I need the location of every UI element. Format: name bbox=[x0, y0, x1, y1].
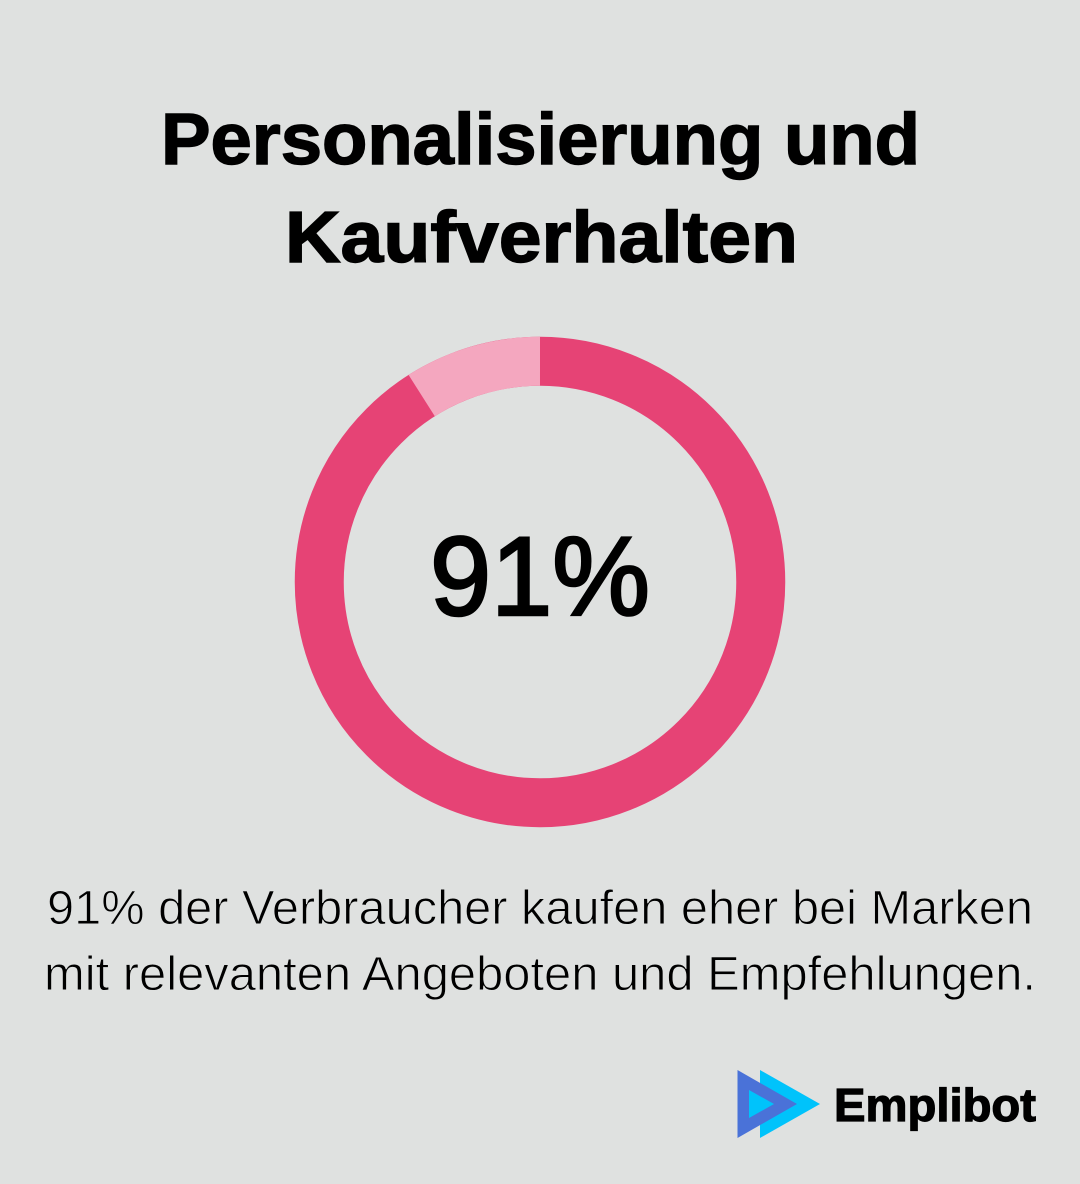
description text bbox=[44, 882, 1036, 1001]
icon: double play triangles bbox=[738, 1070, 820, 1138]
donut chart: 91 percent bbox=[319, 361, 761, 803]
title: Kaufverhalten bbox=[285, 198, 798, 278]
description text: 91% der Verbraucher kaufen eher bei Marken bbox=[47, 882, 1033, 935]
title: Personalisierung und bbox=[161, 100, 920, 180]
title bbox=[161, 100, 920, 278]
description text: mit relevanten Angeboten und Empfehlungen. bbox=[44, 948, 1036, 1001]
logo wordmark: Emplibot bbox=[834, 1079, 1036, 1131]
donut value: 91% bbox=[430, 514, 650, 639]
logo: Emplibot bbox=[738, 1070, 1036, 1138]
